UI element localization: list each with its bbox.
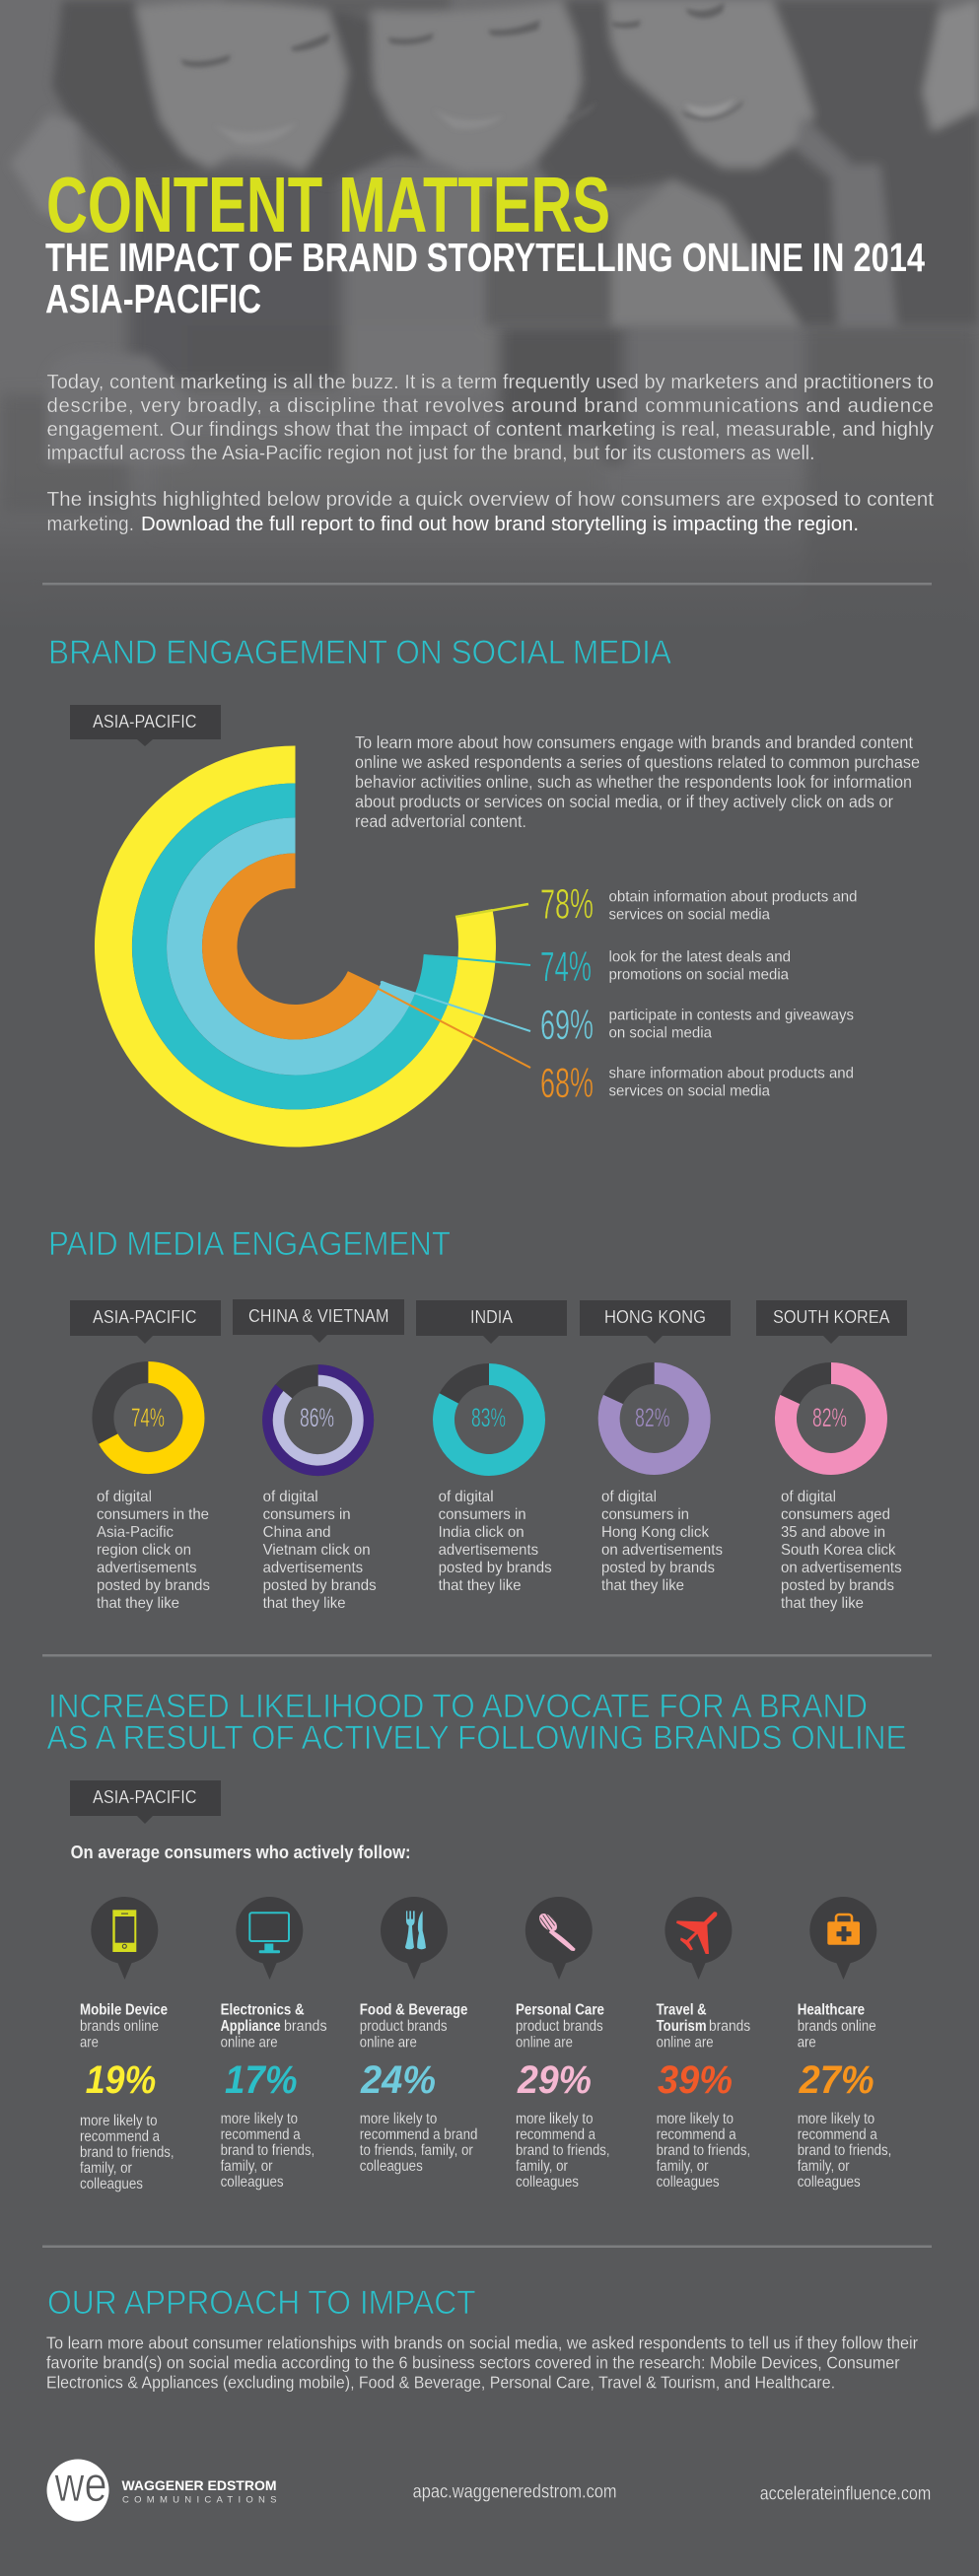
tag <box>756 1300 907 1344</box>
column: india <box>416 1300 567 1594</box>
section intro text: online we asked respondents a series of questions related to common purchase <box>355 752 920 772</box>
category text: Healthcare <box>798 2001 865 2019</box>
donut 82%: 82% <box>812 1403 847 1432</box>
logo: waggener edstrom: WAGGENER EDSTROM <box>122 2477 276 2493</box>
category text: brands online <box>798 2018 876 2035</box>
description: posted by brands <box>601 1560 715 1576</box>
outcome text: colleagues <box>80 2176 143 2193</box>
category text <box>80 2001 168 2051</box>
description: of digital <box>781 1489 836 1505</box>
column: hong kong <box>580 1300 731 1594</box>
section intro text <box>355 732 920 831</box>
icon: airplane pin <box>664 1897 732 1980</box>
description: posted by brands <box>439 1560 552 1576</box>
column: travel & tourism <box>657 1897 750 2191</box>
outcome text: brand to friends, <box>221 2142 315 2159</box>
stat: 69% <box>540 1002 854 1049</box>
tag: asia-pacific <box>70 705 221 746</box>
ring: 68% orange <box>202 854 380 1039</box>
category text: are <box>798 2035 816 2051</box>
percentage: 19% <box>86 2058 156 2102</box>
header photo: three women looking down <box>0 0 979 552</box>
category text: brands <box>284 2018 327 2035</box>
description: China and <box>263 1524 331 1541</box>
stat: 74%: look for the latest deals and <box>609 948 791 966</box>
tag <box>70 1300 221 1344</box>
heading: increased likelihood: AS A RESULT OF ACTIVELY FOLLOWING BRANDS ONLINE <box>47 1719 907 1757</box>
percentage: 24% <box>360 2058 436 2102</box>
tag: CHINA & VIETNAM <box>248 1305 388 1326</box>
description: that they like <box>97 1595 179 1612</box>
description: posted by brands <box>263 1577 377 1594</box>
category text: product brands <box>516 2018 603 2035</box>
outcome text: family, or <box>80 2160 132 2177</box>
leader: 69% <box>381 982 530 1031</box>
category text: online are <box>516 2035 573 2051</box>
outcome text: family, or <box>798 2158 850 2175</box>
description: on advertisements <box>601 1542 723 1559</box>
stat: 69%: 69% <box>540 1002 594 1049</box>
intro text block <box>47 372 935 535</box>
stat: 74% <box>540 943 791 991</box>
outcome text: recommend a <box>80 2128 160 2145</box>
tag: INDIA <box>470 1306 514 1327</box>
outcome text: to friends, family, or <box>360 2142 473 2159</box>
intro text block: describe, very broadly, a discipline that revolves around brand communications and audience <box>47 395 934 417</box>
heading: increased likelihood: INCREASED LIKELIHOOD TO ADVOCATE FOR A BRAND <box>48 1688 868 1725</box>
outcome text <box>657 2111 750 2191</box>
percentage: 39% <box>658 2058 733 2102</box>
lead-in text: On average consumers who actively follow: <box>71 1843 411 1862</box>
outcome text: more likely to <box>516 2111 594 2127</box>
percentage: 29% <box>517 2058 592 2102</box>
category text: brands <box>709 2018 750 2035</box>
description: advertisements <box>263 1560 363 1576</box>
intro text block: impactful across the Asia-Pacific region not just for the brand, but for its customers as well. <box>47 443 814 464</box>
description: region click on <box>97 1542 191 1559</box>
stat: 68%: share information about products and <box>609 1065 854 1082</box>
category text: Tourism <box>657 2018 707 2035</box>
outcome text: brand to friends, <box>657 2142 750 2159</box>
icon: fork and knife pin <box>381 1897 448 1980</box>
stat: 69%: on social media <box>609 1025 712 1041</box>
category text <box>657 2001 750 2051</box>
ring: 78% yellow <box>95 745 496 1148</box>
category text: Appliance <box>221 2018 281 2035</box>
description <box>97 1489 210 1612</box>
outcome text: family, or <box>221 2158 273 2175</box>
outcome text: more likely to <box>798 2111 874 2127</box>
intro text block: marketing. <box>47 514 134 535</box>
category text <box>516 2001 604 2051</box>
description: consumers aged <box>781 1506 890 1523</box>
intro text block: The insights highlighted below provide a quick overview of how consumers are exposed to content <box>47 489 934 511</box>
intro text block: Today, content marketing is all the buzz. It is a term frequently used by marketers and practitioners to <box>47 372 934 393</box>
outcome text: family, or <box>657 2158 709 2175</box>
donut 74%: 74% <box>131 1403 165 1432</box>
description: of digital <box>601 1489 657 1505</box>
approach text: favorite brand(s) on social media according to the 6 business sectors covered in the research: Mobile Devices, Consumer <box>46 2353 900 2373</box>
leader: 68% <box>375 987 530 1068</box>
description <box>263 1489 377 1612</box>
outcome text <box>360 2111 477 2175</box>
approach text: Electronics & Appliances (excluding mobile), Food & Beverage, Personal Care, Travel & Tourism, and Healthcare. <box>46 2373 835 2393</box>
description: on advertisements <box>781 1560 902 1576</box>
description: South Korea click <box>781 1542 896 1559</box>
intro text block: Download the full report to find out how brand storytelling is impacting the region. <box>141 514 859 535</box>
description: of digital <box>263 1489 318 1505</box>
tag: asia-pacific: ASIA-PACIFIC <box>93 711 197 731</box>
description: that they like <box>601 1577 684 1594</box>
tag: HONG KONG <box>604 1306 706 1327</box>
icon: first aid kit pin <box>809 1897 876 1980</box>
stat: 78%: obtain information about products and <box>609 889 858 905</box>
category text <box>221 2001 327 2051</box>
description: consumers in the <box>97 1506 209 1523</box>
outcome text <box>80 2113 175 2193</box>
outcome text: recommend a <box>516 2126 595 2143</box>
category text: online are <box>360 2035 417 2051</box>
logo: waggener edstrom: we <box>54 2457 106 2512</box>
category text: product brands <box>360 2018 448 2035</box>
category text: Travel & <box>657 2001 707 2019</box>
description: of digital <box>97 1489 152 1505</box>
tag: SOUTH KOREA <box>773 1306 890 1327</box>
description: Asia-Pacific <box>97 1524 174 1541</box>
description: advertisements <box>97 1560 197 1576</box>
section intro text: about products or services on social media, or if they actively click on ads or <box>355 792 893 811</box>
description: posted by brands <box>781 1577 894 1594</box>
donut 82% <box>786 1373 876 1464</box>
description: of digital <box>439 1489 494 1505</box>
column: food & beverage <box>360 1897 477 2175</box>
logo: waggener edstrom: COMMUNICATIONS <box>122 2495 276 2506</box>
stat: 68%: 68% <box>540 1060 594 1107</box>
outcome text <box>798 2111 891 2191</box>
category text: Food & Beverage <box>360 2001 468 2019</box>
outcome text: colleagues <box>516 2174 579 2191</box>
intro text block: engagement. Our findings show that the impact of content marketing is real, measurable, and highly <box>47 419 935 441</box>
section intro text: To learn more about how consumers engage with brands and branded content <box>355 732 913 752</box>
subtitle <box>45 235 925 321</box>
approach text: To learn more about consumer relationships with brands on social media, we asked respondents to tell us if they follow their <box>46 2333 918 2353</box>
outcome text: colleagues <box>360 2158 423 2175</box>
column: electronics & appliance <box>221 1897 327 2191</box>
column: mobile device <box>80 1897 175 2193</box>
approach text <box>46 2333 918 2393</box>
stat: 74%: promotions on social media <box>609 966 789 984</box>
donut 74% <box>103 1372 193 1463</box>
tag: ASIA-PACIFIC <box>93 1306 197 1327</box>
donut 83%: 83% <box>471 1403 506 1432</box>
percentage: 17% <box>225 2058 298 2102</box>
description: 35 and above in <box>781 1524 885 1541</box>
description: India click on <box>439 1524 524 1541</box>
outcome text: more likely to <box>657 2111 734 2127</box>
tag: asia-pacific: ASIA-PACIFIC <box>93 1786 197 1807</box>
url: accelerate influence: accelerateinfluence.com <box>760 2484 931 2505</box>
outcome text: family, or <box>516 2158 568 2175</box>
heading: paid media engagement: PAID MEDIA ENGAGEMENT <box>48 1225 451 1263</box>
column: personal care <box>516 1897 610 2191</box>
stat: 78%: 78% <box>540 881 594 929</box>
radial bar chart <box>95 745 530 1148</box>
description: Hong Kong click <box>601 1524 710 1541</box>
section intro text: read advertorial content. <box>355 811 526 831</box>
category text: online are <box>657 2035 714 2051</box>
outcome text: colleagues <box>798 2174 861 2191</box>
outcome text <box>221 2111 315 2191</box>
stat: 78%: services on social media <box>609 907 770 923</box>
leader: 74% <box>424 955 530 965</box>
category text: are <box>80 2035 99 2051</box>
outcome text: more likely to <box>80 2113 158 2129</box>
outcome text: recommend a brand <box>360 2126 477 2143</box>
column: china & vietnam <box>233 1299 404 1612</box>
donut 86% <box>267 1369 369 1471</box>
outcome text: recommend a <box>657 2126 736 2143</box>
icon: hair brush pin <box>525 1897 593 1980</box>
leader: 78% <box>455 904 528 917</box>
donut 82% <box>609 1373 700 1464</box>
category text: Mobile Device <box>80 2001 168 2019</box>
stat: 68%: services on social media <box>609 1082 770 1100</box>
heading: brand engagement on social media: BRAND ENGAGEMENT ON SOCIAL MEDIA <box>48 634 671 671</box>
category text: online are <box>221 2035 278 2051</box>
percentage: 27% <box>799 2058 874 2102</box>
category text: Electronics & <box>221 2001 305 2019</box>
description: advertisements <box>439 1542 538 1559</box>
donut 83% <box>444 1374 534 1465</box>
description: consumers in <box>263 1506 351 1523</box>
outcome text: brand to friends, <box>516 2142 610 2159</box>
column: south korea <box>756 1300 907 1612</box>
donut 86%: 86% <box>300 1403 334 1432</box>
category text: brands online <box>80 2018 159 2035</box>
outcome text: brand to friends, <box>798 2142 891 2159</box>
outcome text: colleagues <box>221 2174 284 2191</box>
description <box>781 1489 902 1612</box>
stat: 78% <box>540 881 858 929</box>
column: asia-pacific <box>70 1300 221 1612</box>
outcome text: brand to friends, <box>80 2144 175 2161</box>
subtitle: ASIA-PACIFIC <box>45 276 261 321</box>
tag <box>580 1300 731 1344</box>
stat: 74%: 74% <box>540 943 592 991</box>
outcome text: more likely to <box>221 2111 298 2127</box>
column: healthcare <box>798 1897 891 2191</box>
ring: 69% light blue <box>167 818 415 1075</box>
outcome text: colleagues <box>657 2174 720 2191</box>
tag <box>416 1300 567 1344</box>
stat: 69%: participate in contests and giveaways <box>609 1008 854 1023</box>
category text <box>798 2001 876 2051</box>
ring: 74% teal <box>132 783 458 1110</box>
donut 82%: 82% <box>635 1403 670 1432</box>
outcome text: recommend a <box>798 2126 877 2143</box>
outcome text <box>516 2111 610 2191</box>
heading: our approach to impact: OUR APPROACH TO IMPACT <box>47 2284 476 2322</box>
outcome text: more likely to <box>360 2111 437 2127</box>
url: apac: apac.waggeneredstrom.com <box>413 2482 617 2502</box>
description <box>601 1489 723 1594</box>
description: Vietnam click on <box>263 1542 371 1559</box>
tag: asia-pacific <box>70 1780 221 1824</box>
category text: Personal Care <box>516 2001 604 2019</box>
tag <box>233 1299 404 1343</box>
icon: phone pin <box>91 1897 158 1980</box>
category text <box>360 2001 468 2051</box>
description: that they like <box>439 1577 522 1594</box>
description: that they like <box>781 1595 864 1612</box>
stat: 68% <box>540 1060 854 1107</box>
icon: monitor pin <box>236 1897 303 1980</box>
description: that they like <box>263 1595 346 1612</box>
description: posted by brands <box>97 1577 210 1594</box>
description <box>439 1489 552 1594</box>
heading: increased likelihood <box>47 1688 907 1757</box>
section intro text: behavior activities online, such as whether the respondents look for information <box>355 772 912 792</box>
outcome text: recommend a <box>221 2126 301 2143</box>
description: consumers in <box>439 1506 526 1523</box>
title: CONTENT MATTERS <box>46 161 610 248</box>
logo: waggener edstrom <box>47 2457 276 2522</box>
description: consumers in <box>601 1506 689 1523</box>
